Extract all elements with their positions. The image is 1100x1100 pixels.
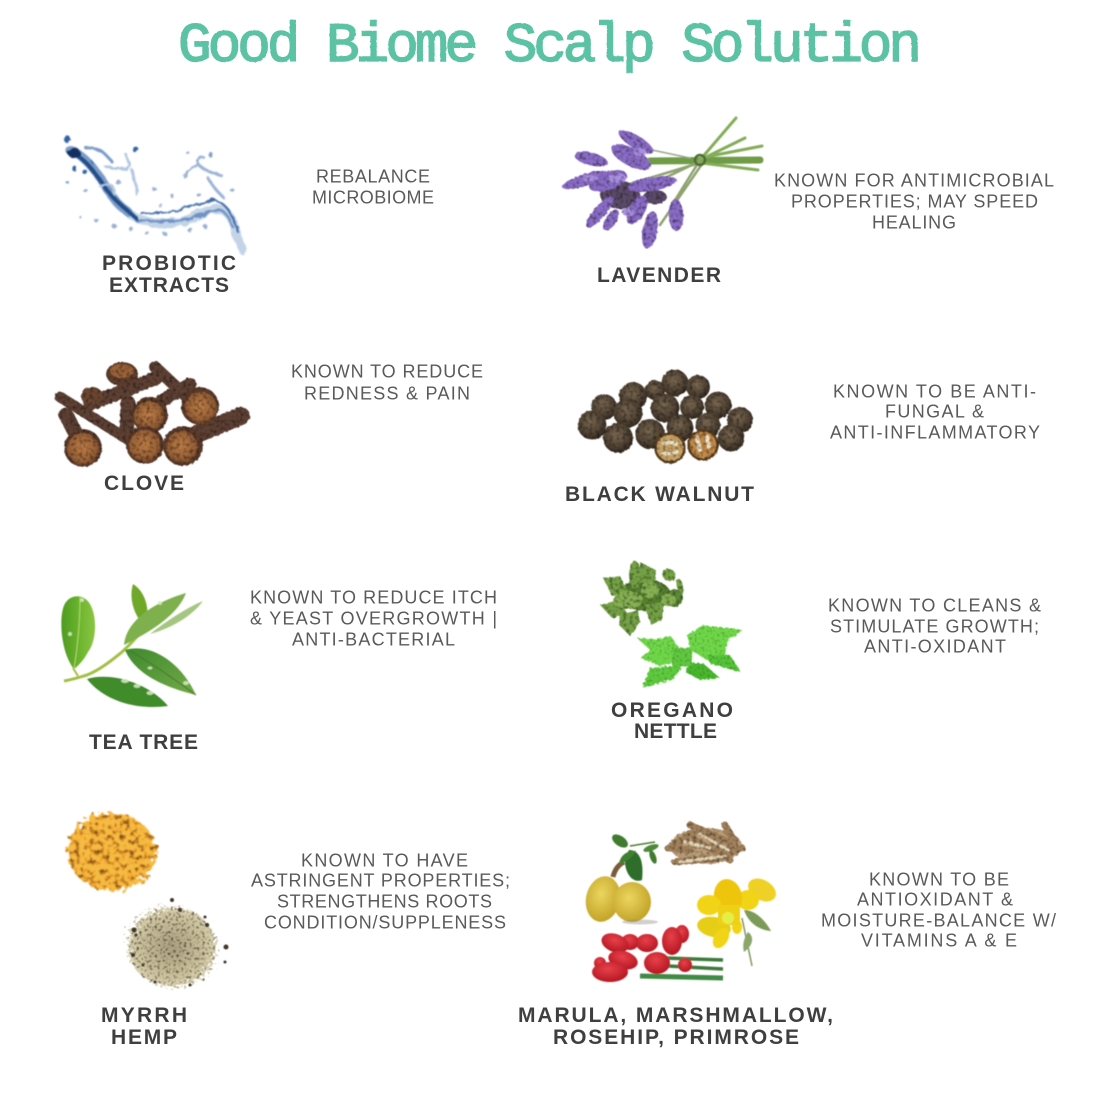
label: black walnut: BLACK WALNUT (565, 483, 754, 506)
description: black walnut: ANTI-INFLAMMATORY (830, 422, 1040, 442)
panel: probiotic extracts (64, 136, 434, 297)
description: lavender: KNOWN FOR ANTIMICROBIAL (774, 170, 1054, 190)
panel: myrrh hemp (68, 813, 510, 1049)
panel: tea tree (61, 584, 497, 754)
description: black walnut: FUNGAL & (885, 402, 984, 422)
description: marula marshmallow rosehip primrose: MOISTURE-BALANCE W/ (821, 910, 1056, 930)
description: tea tree (250, 588, 497, 650)
label: oregano nettle (611, 699, 733, 743)
description: tea tree: & YEAST OVERGROWTH | (250, 608, 497, 628)
description: myrrh hemp: KNOWN TO HAVE (301, 850, 468, 870)
description: marula marshmallow rosehip primrose: ANTIOXIDANT & (857, 890, 1013, 910)
label: probiotic extracts (102, 252, 236, 297)
label: myrrh hemp (101, 1004, 187, 1049)
icon: lavender bunch (560, 118, 762, 250)
description: tea tree: ANTI-BACTERIAL (292, 630, 455, 650)
icon: marula fruits (582, 832, 660, 925)
label: probiotic extracts: PROBIOTIC (102, 252, 236, 275)
label: oregano nettle: OREGANO (611, 699, 733, 722)
label: myrrh hemp: HEMP (111, 1026, 177, 1049)
panel: black walnut (565, 370, 1040, 506)
description: oregano nettle (828, 596, 1041, 656)
panel: lavender (560, 118, 1054, 287)
description: clove: REDNESS & PAIN (304, 384, 470, 404)
title: Good Biome Scalp Solution (178, 14, 922, 78)
label: marula marshmallow rosehip primrose: MARULA, MARSHMALLOW, (518, 1004, 833, 1027)
panel: marula marshmallow rosehip primrose (518, 825, 1056, 1049)
panel: oregano nettle (600, 561, 1041, 743)
icon: tea tree leaves (61, 584, 203, 707)
description: black walnut (830, 382, 1040, 442)
icon: cloves (60, 362, 241, 467)
description: myrrh hemp: CONDITION/SUPPLENESS (264, 912, 506, 932)
icon: water splash (64, 136, 243, 250)
description: lavender (774, 170, 1054, 232)
icon: myrrh resin pile (68, 813, 156, 891)
description: myrrh hemp: STRENGTHENS ROOTS (277, 892, 492, 912)
panel: clove (60, 362, 483, 495)
icon: oregano leaves (600, 561, 685, 636)
label: tea tree: TEA TREE (89, 731, 198, 754)
label: oregano nettle: NETTLE (634, 720, 717, 743)
description: oregano nettle: ANTI-OXIDANT (864, 636, 1006, 656)
label: probiotic extracts: EXTRACTS (109, 274, 229, 297)
description: oregano nettle: STIMULATE GROWTH; (830, 616, 1039, 636)
description: myrrh hemp: ASTRINGENT PROPERTIES; (251, 870, 510, 890)
description: probiotic: MICROBIOME (312, 188, 434, 208)
description: lavender: PROPERTIES; MAY SPEED (791, 192, 1038, 212)
description: tea tree: KNOWN TO REDUCE ITCH (250, 588, 497, 608)
description: marula marshmallow rosehip primrose: KNOWN TO BE (869, 870, 1009, 890)
description: clove (291, 362, 483, 404)
label: marula marshmallow rosehip primrose: ROSEHIP, PRIMROSE (553, 1026, 799, 1049)
description: oregano nettle: KNOWN TO CLEANS & (828, 596, 1041, 616)
description: myrrh hemp (251, 850, 510, 932)
icon: rosehips (592, 925, 723, 982)
description: marula marshmallow rosehip primrose (821, 870, 1056, 950)
icon: marshmallow root (668, 825, 742, 864)
description: probiotic (312, 166, 434, 208)
description: black walnut: KNOWN TO BE ANTI- (833, 382, 1036, 402)
description: lavender: HEALING (872, 212, 956, 232)
label: clove: CLOVE (104, 472, 184, 495)
description: probiotic: REBALANCE (316, 166, 430, 186)
label: myrrh hemp: MYRRH (101, 1004, 187, 1027)
icon: hemp seed pile (128, 898, 228, 987)
description: clove: KNOWN TO REDUCE (291, 362, 483, 382)
icon: nettle leaves (637, 625, 743, 688)
label: marula marshmallow rosehip primrose (518, 1004, 833, 1049)
description: marula marshmallow rosehip primrose: VITAMINS A & E (861, 930, 1017, 950)
icon: primrose flower (696, 874, 780, 966)
icon: black walnuts (578, 370, 753, 462)
label: lavender: LAVENDER (597, 264, 721, 287)
